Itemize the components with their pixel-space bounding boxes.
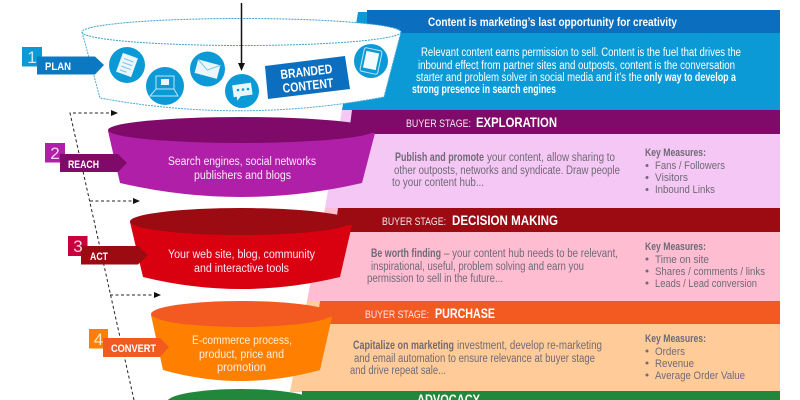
reach funnel text: Search engines, social networks [168, 156, 316, 168]
funnel: convert [151, 301, 332, 381]
exploration description: your content, allow sharing to [487, 152, 615, 164]
exploration key measures: Key Measures: [645, 147, 706, 159]
purchase description: investment, develop re-marketing [457, 340, 602, 352]
step label: 1 plan [22, 47, 104, 74]
convert funnel text: product, price and [199, 349, 284, 361]
exploration key measures: Visitors [655, 172, 688, 184]
decision making description: inspirational, useful, problem solving and earn you [371, 261, 584, 273]
icon: envelope [190, 52, 225, 86]
purchase description: Capitalize on marketing [353, 340, 454, 352]
plan heading: Content is marketing’s last opportunity for creativity [428, 15, 677, 29]
purchase heading: BUYER STAGE: [365, 309, 429, 321]
exploration key measures [645, 147, 725, 196]
step label: 1 plan: 1 [27, 48, 37, 67]
step label: 4 convert [89, 329, 169, 357]
decision making heading: DECISION MAKING [452, 212, 558, 228]
step label: 4 convert: CONVERT [111, 343, 156, 355]
purchase description: and email automation to ensure relevance at buyer stage [354, 353, 595, 365]
purchase key measures [645, 333, 745, 382]
panel: advocacy [302, 391, 780, 400]
act funnel text: and interactive tools [194, 263, 289, 275]
panel: exploration [325, 110, 780, 208]
plan description: strong presence in search engines [412, 84, 556, 96]
decision making description: permission to sell in the future... [367, 273, 503, 285]
plan description: inbound effect from partner sites and outposts, content is the conversation [418, 60, 735, 72]
purchase description: and drive repeat sale... [350, 365, 446, 377]
branded content label: BRANDED [280, 61, 333, 82]
funnel: act [130, 208, 352, 289]
purchase key measures: Orders [655, 346, 685, 358]
panel: plan [342, 10, 780, 110]
act funnel text: Your web site, blog, community [168, 249, 315, 261]
decision making key measures: Leads / Lead conversion [655, 278, 757, 290]
step label: 2 reach: 2 [50, 144, 60, 163]
purchase key measures: Revenue [655, 358, 694, 370]
icon: laptop [146, 67, 184, 105]
exploration key measures: Fans / Followers [655, 160, 725, 172]
exploration heading: BUYER STAGE: [406, 118, 471, 130]
branded content label [265, 56, 350, 99]
exploration description [392, 152, 620, 189]
plan description: starter and problem solver in social media and it’s the [416, 72, 642, 84]
plan description: only way to develop a [644, 72, 736, 84]
funnel: advocacy [167, 389, 315, 400]
icon: tablet [354, 44, 388, 78]
convert funnel text [192, 335, 292, 374]
step label: 1 plan: PLAN [45, 61, 71, 73]
decision making description: Be worth finding [371, 248, 441, 260]
decision making key measures: Time on site [655, 254, 709, 266]
exploration description: Publish and promote [395, 152, 484, 164]
decision making description: – your content hub needs to be relevant, [444, 248, 618, 260]
act funnel text [168, 249, 315, 275]
exploration heading [406, 114, 557, 130]
step label: 2 reach [45, 143, 127, 172]
step label: 4 convert: 4 [94, 330, 103, 349]
panel: decision making [307, 208, 780, 301]
purchase heading [365, 305, 495, 321]
decision making description [367, 248, 618, 285]
convert funnel text: promotion [217, 362, 266, 374]
funnel: plan [82, 18, 401, 111]
reach funnel text [168, 156, 316, 182]
decision making key measures: Key Measures: [645, 241, 706, 253]
exploration key measures: Inbound Links [655, 184, 715, 196]
decision making heading: BUYER STAGE: [382, 216, 446, 228]
plan description: Relevant content earns permission to sell. Content is the fuel that drives the [421, 47, 741, 59]
icon: chat bubble [225, 74, 259, 108]
arrow: content into funnel [238, 3, 245, 71]
exploration description: to your content hub... [392, 177, 484, 189]
purchase heading: PURCHASE [435, 305, 495, 321]
decision making key measures: Shares / comments / links [655, 266, 765, 278]
plan description [412, 47, 741, 96]
icon: document [109, 47, 145, 83]
step label: 3 act [68, 236, 148, 264]
funnel: reach [108, 117, 375, 197]
panel: purchase [290, 301, 780, 392]
exploration description: other outposts, networks and syndicate. Draw people [394, 165, 620, 177]
branded content label: CONTENT [282, 75, 334, 96]
purchase key measures: Average Order Value [655, 370, 745, 382]
convert funnel text: E-commerce process, [192, 335, 292, 347]
decision making key measures [645, 241, 765, 290]
step label: 3 act: 3 [73, 237, 83, 256]
exploration heading: EXPLORATION [476, 114, 557, 130]
step label: 2 reach: REACH [68, 159, 99, 171]
dashed feedback arrows [70, 110, 161, 400]
purchase key measures: Key Measures: [645, 333, 706, 345]
step label: 3 act: ACT [90, 251, 108, 263]
decision making heading [382, 212, 558, 228]
reach funnel text: publishers and blogs [194, 170, 291, 182]
purchase description [350, 340, 602, 377]
